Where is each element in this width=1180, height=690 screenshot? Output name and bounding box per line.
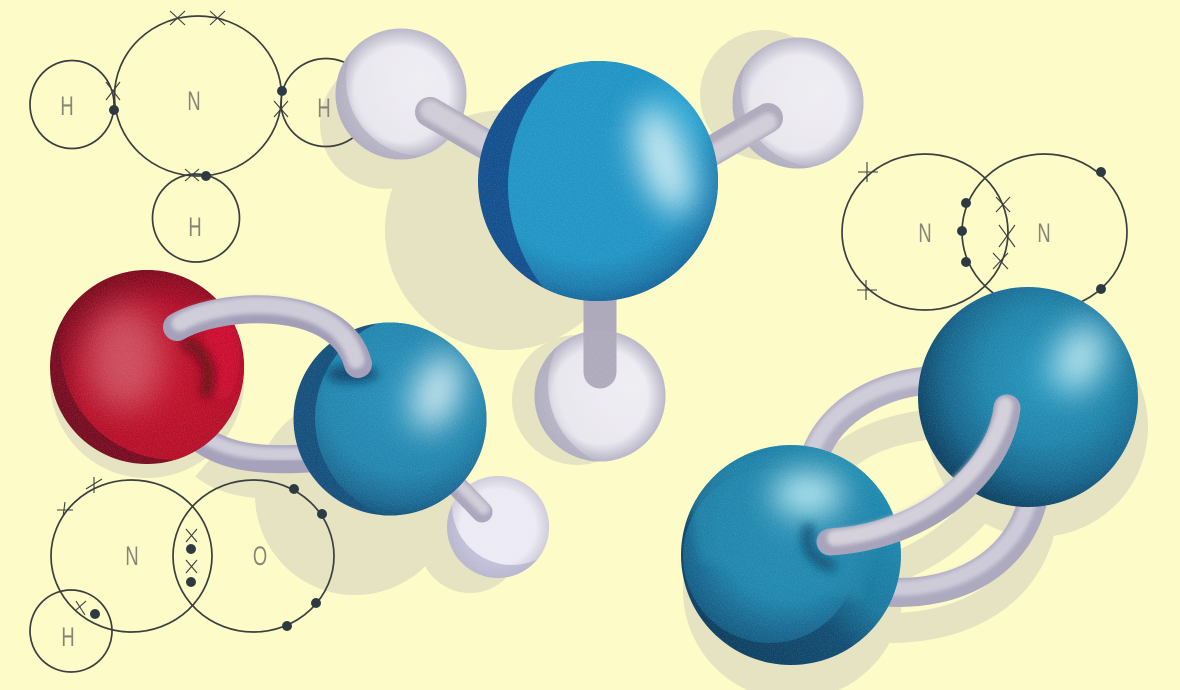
bond: hydrogen (458, 485, 484, 512)
hydrogen: bottom (534, 332, 666, 462)
bond: right (705, 118, 768, 159)
diagram: nitroxyl electron shells (30, 477, 334, 672)
diagram: ammonia electron shells (30, 11, 371, 262)
molecule: nitroxyl (50, 270, 549, 578)
diagram: ammonia electron shells: H (188, 211, 202, 242)
hydrogen: right (732, 38, 864, 168)
bond: lower (200, 434, 315, 459)
nitrogen atom: lower (680, 444, 902, 666)
diagram: ammonia electron shells: N (187, 85, 201, 116)
bond: upper (177, 305, 358, 364)
diagram: dinitrogen electron shells: N (918, 217, 932, 248)
bond: bottom (584, 290, 616, 372)
diagram: nitroxyl electron shells: O (253, 540, 267, 571)
molecule: ammonia (335, 4, 895, 469)
bond: upper ring (812, 377, 935, 455)
diagram: dinitrogen electron shells: N (1037, 217, 1051, 248)
bond: front (830, 405, 1007, 542)
nitrogen atom (294, 322, 486, 516)
oxygen atom (50, 270, 244, 464)
nitrogen atom (478, 61, 718, 301)
hydrogen atom (447, 476, 549, 578)
diagram: nitroxyl electron shells: N (125, 540, 139, 571)
diagram: nitroxyl electron shells: H (61, 621, 75, 652)
bond: left (430, 110, 495, 150)
diagram: ammonia electron shells: H (317, 92, 331, 123)
diagram: dinitrogen electron shells (842, 154, 1127, 310)
bond: lower ring (885, 495, 1034, 592)
nitrogen atom: upper (917, 286, 1139, 508)
diagram: ammonia electron shells: H (60, 90, 74, 121)
hydrogen: left (336, 28, 466, 160)
molecule: dinitrogen (680, 286, 1139, 666)
